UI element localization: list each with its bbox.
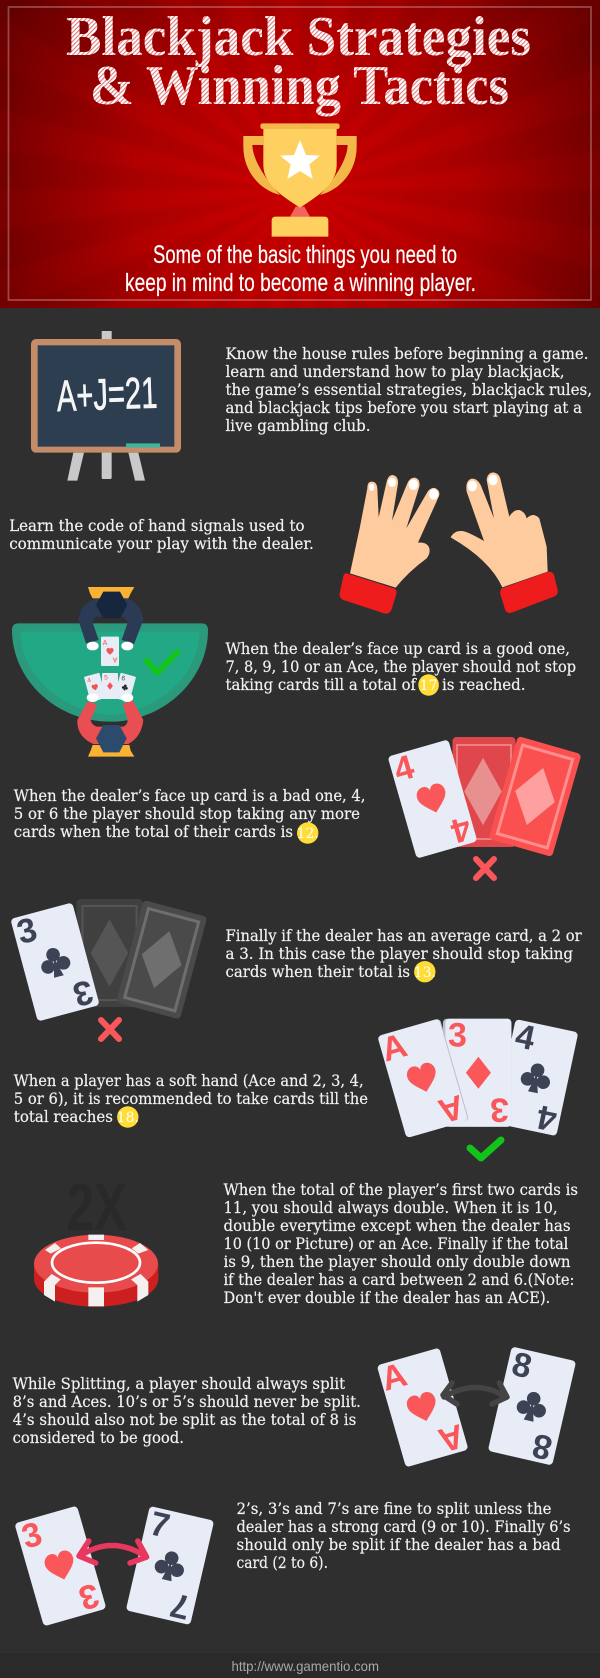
text: house rules	[226, 345, 592, 435]
card: ace of hearts: A	[377, 1356, 411, 1399]
text: soft hand	[14, 1072, 368, 1128]
text: house rules: and blackjack tips before you start playing at a	[226, 399, 582, 417]
text: doubling: is 9, then the player should only double down	[224, 1253, 571, 1271]
text: house rules: Know the house rules before beginning a game.	[226, 345, 588, 363]
card: 8 of clubs: 8	[529, 1426, 556, 1467]
icon: hands	[339, 472, 558, 614]
label: 2X: 2X	[67, 1171, 127, 1245]
chip stripes	[44, 1235, 148, 1306]
card back	[489, 736, 581, 857]
illustration: red cards with 4 of hearts	[387, 736, 581, 878]
illustration: chalkboard	[31, 331, 181, 481]
icon: trophy	[243, 123, 357, 237]
card: 3 of clubs	[10, 900, 100, 1024]
subtitle: Some of the basic things you need to	[153, 241, 457, 269]
text: other splits: card (2 to 6).	[236, 1554, 328, 1572]
text: good dealer card: 17	[420, 678, 438, 694]
illustration: split three and seven	[14, 1503, 215, 1629]
header red background	[0, 0, 600, 308]
icon: check mark	[470, 1140, 501, 1158]
highlight: 18	[117, 1106, 138, 1128]
dealer card: A	[103, 640, 108, 647]
panel: header	[0, 0, 600, 308]
card: 7 of clubs: 7	[167, 1585, 194, 1626]
card: 3 of clubs: 3	[13, 910, 41, 952]
text: splitting	[13, 1375, 361, 1447]
highlight: 17	[418, 674, 439, 696]
text: average dealer card: Finally if the dealer has an average card, a 2 or	[226, 927, 582, 945]
card: 7 of clubs	[125, 1504, 215, 1627]
card back	[116, 900, 207, 1019]
text: splitting: 8’s and Aces. 10’s or 5’s should never be split.	[13, 1393, 361, 1411]
text: house rules: learn and understand how to play blackjack,	[226, 363, 564, 381]
card: 4 of hearts: 4	[447, 808, 475, 850]
illustration: soft hand cards	[377, 1015, 579, 1158]
text: good dealer card	[226, 640, 576, 696]
card: ace of hearts: A	[377, 1026, 411, 1070]
text: bad dealer card: 12.	[297, 826, 319, 842]
illustration: blackjack table	[12, 587, 208, 757]
icon: cross	[101, 1020, 119, 1039]
text: house rules: live gambling club.	[226, 417, 370, 435]
card: 4 of clubs: 4	[534, 1097, 560, 1138]
text: soft hand: When a player has a soft hand (Ace and 2, 3, 4,	[14, 1072, 364, 1090]
text: bad dealer card	[14, 787, 366, 844]
text: good dealer card: is reached.	[442, 676, 526, 694]
text: splitting: considered to be good.	[13, 1429, 184, 1447]
text: soft hand: 5 or 6), it is recommended to take cards till the	[14, 1090, 368, 1108]
text: splitting: 4’s should also not be split as the total of 8 is	[13, 1411, 356, 1429]
text: doubling: Don't ever double if the dealer has an ACE).	[224, 1289, 550, 1307]
text: doubling: double everytime except when the dealer has	[224, 1217, 571, 1235]
text: soft hand: total reaches	[14, 1108, 113, 1126]
text: hand signals: communicate your play with the dealer.	[9, 535, 314, 553]
icon: cross	[476, 859, 494, 878]
text: bad dealer card: 5 or 6 the player should stop taking any more	[14, 805, 360, 823]
title	[66, 6, 531, 117]
text: average dealer card: 13.	[414, 965, 436, 981]
footer	[0, 1653, 600, 1678]
dealer card: A	[112, 656, 117, 663]
card: 3 of clubs: 3	[69, 972, 97, 1014]
card: ace of hearts: A	[434, 1087, 468, 1130]
text: splitting: While Splitting, a player should always split	[13, 1375, 346, 1393]
header frame	[8, 7, 591, 300]
chip side	[34, 1264, 158, 1307]
text: hand signals: Learn the code of hand signals used to	[9, 517, 305, 535]
text: good dealer card: When the dealer’s face up card is a good one,	[226, 640, 570, 658]
footer url: http://www.gamentio.com	[232, 1658, 379, 1674]
player cards	[84, 673, 136, 702]
text: average dealer card: cards when their total is	[226, 963, 410, 981]
card: 3 of hearts: 3	[18, 1515, 46, 1557]
title: Blackjack Strategies	[66, 6, 531, 68]
card back	[76, 899, 142, 1007]
card: 3 of diamonds: 3	[448, 1017, 467, 1055]
card: ace of hearts: A	[434, 1416, 468, 1459]
card: ace of hearts	[376, 1345, 469, 1470]
illustration: split ace and eight	[376, 1344, 577, 1470]
arrow: swap	[443, 1383, 507, 1404]
text: doubling: if the dealer has a card between 2 and 6.(Note:	[224, 1271, 574, 1289]
text: bad dealer card: When the dealer’s face up card is a bad one, 4,	[14, 787, 366, 805]
text: doubling: 11, you should always double. When it is 10,	[224, 1199, 558, 1217]
player cards: 6	[120, 675, 126, 683]
text: doubling	[224, 1181, 578, 1307]
card: 3 of hearts: 3	[75, 1575, 103, 1617]
header sun rays	[78, 0, 522, 308]
arrow: swap	[79, 1541, 147, 1563]
card: 8 of clubs	[487, 1344, 577, 1468]
card: ace of hearts	[377, 1015, 470, 1141]
dealer	[78, 592, 143, 650]
chip ring	[52, 1243, 140, 1283]
player chair	[88, 745, 134, 757]
card: 4 of hearts	[387, 736, 478, 862]
card back	[452, 737, 516, 847]
text: hand signals	[9, 517, 314, 553]
text: other splits	[236, 1500, 571, 1572]
card: 4 of clubs: 4	[512, 1017, 538, 1058]
text: good dealer card: 7, 8, 9, 10 or an Ace, the player should not stop	[226, 658, 576, 676]
table top	[12, 623, 208, 722]
chip top	[34, 1235, 158, 1293]
icon: check mark	[147, 652, 177, 673]
player cards: 5	[104, 675, 108, 682]
illustration: 2X chip	[34, 1171, 158, 1307]
text: other splits: dealer has a strong card (9 or 10). Finally 6’s	[236, 1518, 571, 1536]
text: bad dealer card: cards when the total of their cards is	[14, 823, 293, 841]
text: other splits: 2’s, 3’s and 7’s are fine to split unless the	[236, 1500, 552, 1518]
text: other splits: should only be split if the dealer has a bad	[236, 1536, 561, 1554]
highlight: 12	[297, 822, 318, 844]
card: 3 of diamonds	[443, 1017, 511, 1129]
text: average dealer card	[226, 927, 582, 982]
text: doubling: When the total of the player’s first two cards is	[224, 1181, 578, 1199]
player	[77, 700, 143, 752]
player cards: 4	[86, 677, 92, 685]
chalk equation: A+J=21	[56, 369, 158, 421]
text: average dealer card: a 3. In this case the player should stop taking	[226, 945, 573, 963]
text: soft hand: 18.	[117, 1110, 139, 1126]
card: 7 of clubs: 7	[146, 1505, 173, 1546]
illustration: gray cards with 3 of clubs	[10, 899, 207, 1039]
text: good dealer card: taking cards till a total of	[226, 676, 417, 694]
card: 8 of clubs: 8	[508, 1345, 535, 1386]
dealer chair	[88, 587, 134, 598]
card: 4 of clubs	[493, 1016, 579, 1139]
subtitle: keep in mind to become a winning player.	[125, 269, 476, 297]
text: doubling: 10 (10 or Picture) or an Ace. Finally if the total	[224, 1235, 568, 1253]
dealer card	[101, 637, 119, 666]
title: & Winning Tactics	[90, 55, 509, 117]
subtitle	[125, 241, 476, 297]
text: house rules: the game’s essential strategies, blackjack rules,	[226, 381, 592, 399]
highlight: 13	[414, 961, 435, 982]
card: 4 of hearts: 4	[390, 748, 418, 790]
card: 3 of hearts	[14, 1503, 107, 1629]
card: 3 of diamonds: 3	[490, 1091, 509, 1129]
